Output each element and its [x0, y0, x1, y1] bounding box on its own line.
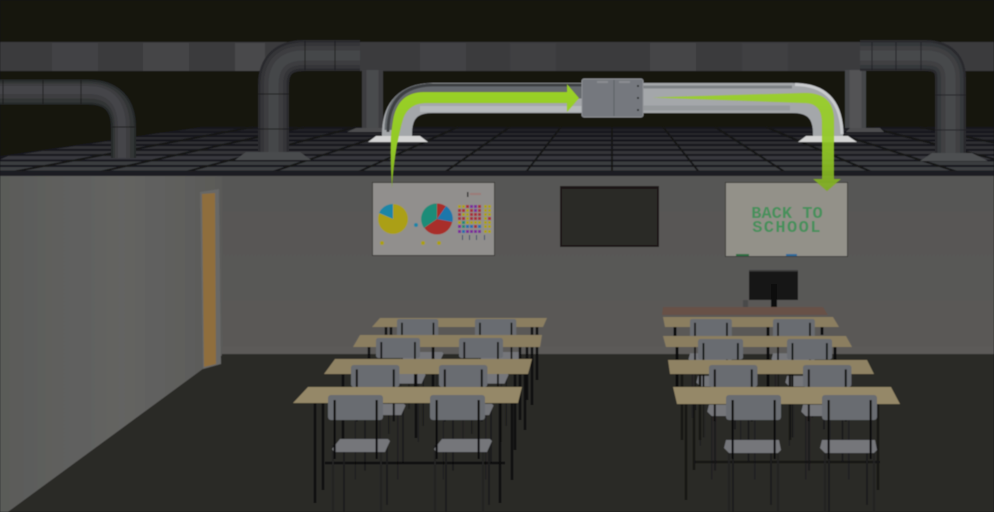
central duct floor plates — [368, 136, 857, 142]
central metal duct — [388, 84, 842, 138]
back left duct — [258, 41, 372, 153]
teacher monitor — [743, 270, 798, 313]
row 4 — [293, 387, 522, 512]
right whiteboard: SCHOOL — [752, 219, 822, 238]
row 1 — [372, 318, 547, 416]
right duct plates — [846, 128, 988, 161]
airflow arrow: intake to unit — [391, 84, 579, 188]
back left duct plate — [347, 128, 383, 132]
wall television — [560, 186, 659, 247]
left whiteboard — [372, 182, 494, 256]
row 3 — [324, 359, 532, 479]
air handling unit — [582, 79, 643, 117]
whiteboard message: BACK TO — [751, 205, 823, 224]
multicolour pie chart — [421, 203, 453, 234]
legend dots — [380, 223, 441, 245]
concrete upper band — [0, 42, 994, 71]
left desk group — [293, 318, 547, 512]
row 1 — [663, 317, 839, 418]
back right duct — [856, 42, 966, 153]
far left duct — [0, 80, 135, 158]
row 3 — [668, 360, 874, 479]
row 2 — [663, 336, 852, 446]
airflow arrow: unit to room — [652, 93, 841, 191]
walls and floor — [0, 176, 994, 512]
grid stems and title — [462, 192, 485, 240]
colour square grid — [458, 205, 491, 233]
left duct floor plate — [235, 152, 311, 160]
row 4 — [673, 387, 900, 512]
row 2 — [353, 335, 542, 442]
right whiteboard — [726, 182, 848, 256]
teacher desk — [662, 307, 828, 315]
ceiling grid — [0, 127, 994, 176]
right desk group — [662, 270, 900, 512]
door — [200, 189, 221, 369]
yellow pie chart — [378, 204, 408, 234]
